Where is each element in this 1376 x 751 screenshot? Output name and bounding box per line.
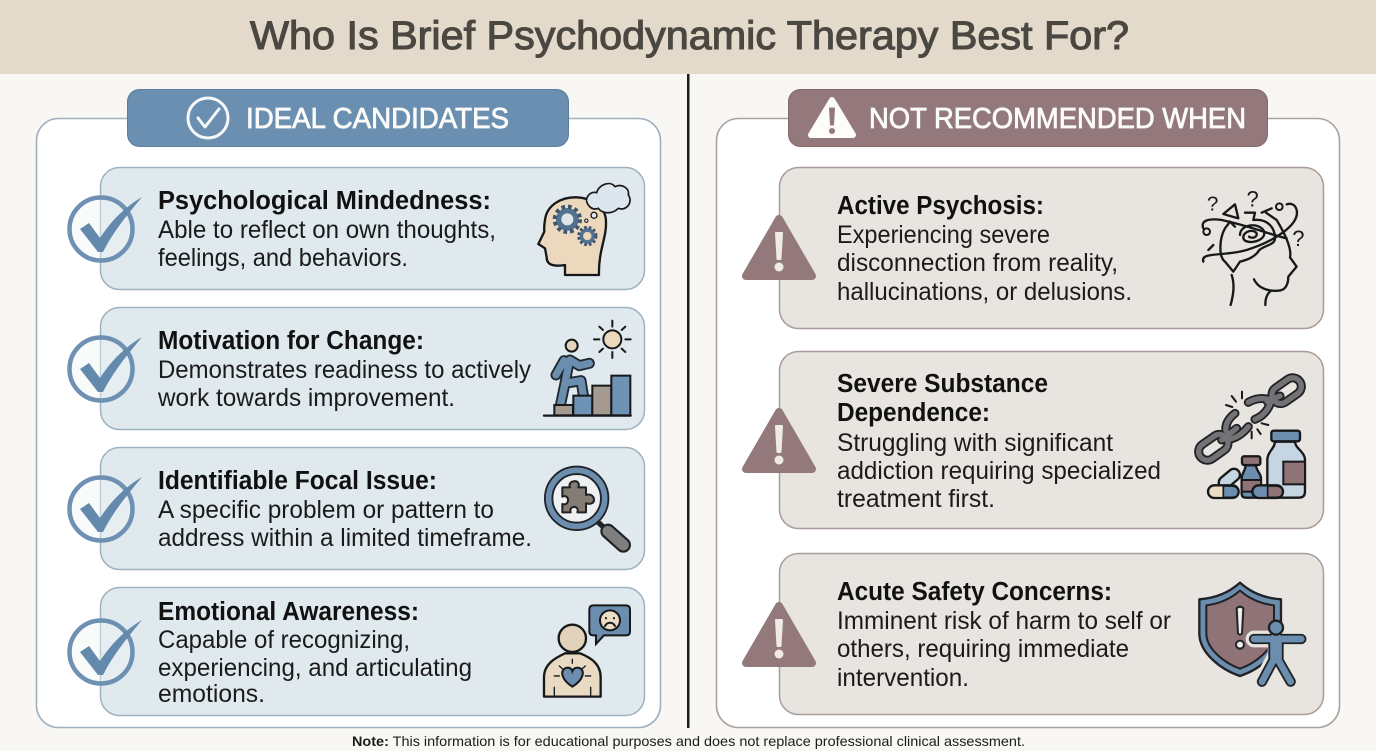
icon: magnifier with puzzle piece [549, 470, 623, 545]
icon: confused mind: ? [1207, 193, 1218, 216]
icon: check [70, 337, 142, 400]
text [158, 598, 472, 708]
text: Motivation for Change: [158, 327, 424, 355]
text: Emotional Awareness: [158, 598, 419, 626]
text: Psychological Mindedness: [158, 187, 491, 215]
header: ideal candidates [128, 90, 568, 146]
card: acute safety concerns [746, 554, 1324, 714]
icon: warning triangle [746, 219, 812, 276]
text: others, requiring immediate [837, 635, 1129, 663]
icon: warning triangle [746, 412, 812, 469]
card: emotional awareness [70, 588, 644, 716]
card: severe substance dependence [746, 352, 1324, 528]
text: Severe Substance [837, 370, 1048, 398]
icon: warning triangle [746, 606, 812, 663]
card: identifiable focal issue [70, 448, 644, 570]
icon: climbing steps [544, 321, 631, 416]
title banner: Who Is Brief Psychodynamic Therapy Best For? [250, 14, 1129, 58]
text: Active Psychosis: [837, 192, 1044, 220]
text: Identifiable Focal Issue: [158, 467, 437, 495]
text [158, 187, 496, 272]
text: Acute Safety Concerns: [837, 578, 1112, 606]
text: experiencing, and articulating [158, 654, 472, 682]
text: Experiencing severe [837, 221, 1050, 249]
text: work towards improvement. [157, 384, 455, 412]
icon: confused mind: ? [1292, 226, 1304, 251]
text: emotions. [158, 680, 265, 708]
text [837, 192, 1132, 306]
text: Dependence: [837, 399, 990, 427]
icon: person with heart and speech bubble [544, 605, 630, 697]
text [837, 370, 1161, 513]
footnote: Note: This information is for educational purposes and does not replace professional clinical assessment. [352, 733, 1025, 749]
icon: head with gears [538, 184, 630, 275]
text: A specific problem or pattern to [158, 496, 494, 524]
text: Able to reflect on own thoughts, [158, 216, 496, 244]
card: motivation for change [70, 308, 644, 430]
text: disconnection from reality, [837, 249, 1118, 277]
header: ideal candidates: IDEAL CANDIDATES [246, 103, 509, 135]
text: Capable of recognizing, [158, 626, 410, 654]
icon: broken chain and medication [1195, 374, 1305, 498]
card: active psychosis [746, 168, 1324, 328]
panel: ideal candidates [36, 90, 660, 728]
text: Demonstrates readiness to actively [158, 356, 531, 384]
card: psychological mindedness [70, 168, 644, 290]
text: hallucinations, or delusions. [837, 278, 1132, 306]
panel: not recommended when [716, 90, 1340, 728]
icon: check [70, 620, 142, 684]
icon: shield and figure [1199, 583, 1301, 682]
text: feelings, and behaviors. [158, 244, 408, 272]
header: not recommended when [788, 90, 1268, 146]
icon: check [70, 197, 142, 260]
icon: confused mind [1203, 187, 1304, 305]
text [837, 578, 1171, 692]
text: Struggling with significant [837, 429, 1113, 457]
text: treatment first. [837, 485, 995, 513]
text: address within a limited timeframe. [158, 524, 532, 552]
title banner [0, 0, 1376, 74]
text: Imminent risk of harm to self or [837, 607, 1171, 635]
text: addiction requiring specialized [837, 457, 1161, 485]
header: not recommended when: NOT RECOMMENDED WHEN [869, 103, 1246, 135]
text [158, 467, 532, 552]
text: intervention. [837, 664, 969, 692]
icon: check [70, 477, 142, 540]
icon: confused mind: ? [1247, 187, 1259, 212]
text [157, 327, 531, 412]
